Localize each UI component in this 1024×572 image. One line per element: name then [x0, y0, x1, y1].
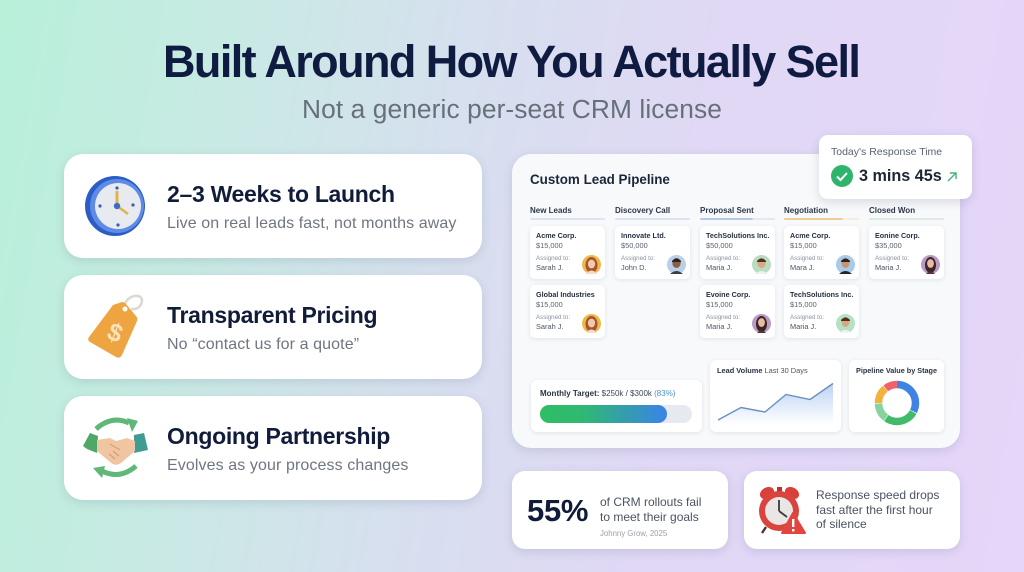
source: Johnny Grow, 2025 [600, 529, 667, 538]
statistic text [600, 495, 701, 524]
lead card: Innovate Ltd [615, 226, 690, 279]
description: Evolves as your process changes [167, 457, 408, 474]
lead card: TechSolutions Inc: TechSolutions Inc. [706, 231, 769, 240]
icon: price tag: $ [103, 317, 127, 349]
lead card: Acme Corp: Assigned to: [536, 255, 570, 262]
lead card: TechSolutions negotiation: Assigned to: [790, 314, 824, 321]
lead card: Eonine Corp [869, 226, 944, 279]
stat card: response speed [744, 471, 960, 549]
heading: 2–3 Weeks to Launch [167, 181, 395, 207]
panel: pipeline dashboard [512, 154, 960, 448]
callout text: of silence [816, 517, 867, 531]
statistic text: to meet their goals [600, 510, 699, 524]
progress bar [540, 405, 692, 423]
callout label: Today's Response Time [831, 146, 942, 158]
column: New Leads: New Leads [530, 206, 572, 215]
callout text: fast after the first hour [816, 502, 933, 516]
lead card: TechSolutions Inc: Assigned to: [706, 255, 740, 262]
lead card: TechSolutions negotiation [784, 285, 859, 338]
callout text: Response speed drops [816, 488, 939, 502]
lead card: Innovate Ltd: John D. [621, 263, 646, 272]
donut chart [874, 380, 920, 426]
icon: clock [85, 176, 145, 236]
dashboard heading: Custom Lead Pipeline [530, 172, 670, 187]
heading: Ongoing Partnership [167, 423, 390, 449]
heading: Transparent Pricing [167, 302, 377, 328]
lead card: TechSolutions Inc: $50,000 [706, 241, 733, 250]
icon: price tag [88, 294, 144, 358]
description: Live on real leads fast, not months away [167, 215, 456, 232]
lead card: TechSolutions negotiation: Maria J. [790, 322, 816, 331]
donut label: Pipeline Value by Stage [856, 366, 937, 375]
lead card: TechSolutions Inc [700, 226, 775, 279]
icon: handshake with arrows [83, 418, 148, 478]
lead card: Acme Corp: Acme Corp. [536, 231, 576, 240]
lead card: Innovate Ltd: Assigned to: [621, 255, 655, 262]
lead card: Global Industries: $15,000 [536, 300, 563, 309]
panel: pricing benefit [64, 275, 482, 379]
statistic: 55% [527, 493, 588, 528]
stat card: 55 percent [512, 471, 728, 549]
lead card: Acme Corp negotiation: Acme Corp. [790, 231, 830, 240]
lead card: Acme Corp: $15,000 [536, 241, 563, 250]
lead card: Global Industries [530, 285, 605, 338]
callout: response time [819, 135, 972, 199]
lead card: Evoine Corp: Assigned to: [706, 314, 740, 321]
lead card: Acme Corp [530, 226, 605, 279]
column: Discovery Call: Discovery Call [615, 206, 670, 215]
lead card: Eonine Corp: Maria J. [875, 263, 901, 272]
icon: trend arrow [948, 172, 957, 182]
lead card: Evoine Corp: Maria J. [706, 322, 732, 331]
lead card: Acme Corp negotiation: Mara J. [790, 263, 815, 272]
widget: monthly target [531, 380, 702, 432]
statistic text: of CRM rollouts fail [600, 495, 701, 509]
lead card: TechSolutions Inc: Maria J. [706, 263, 732, 272]
lead card: Evoine Corp: Evoine Corp. [706, 290, 750, 299]
lead card: TechSolutions negotiation: TechSolutions Inc. [790, 290, 853, 299]
column: Negotiation: Negotiation [784, 206, 828, 215]
lead card: Global Industries: Sarah J. [536, 322, 564, 331]
lead card: Evoine Corp [700, 285, 775, 338]
lead card: Evoine Corp: $15,000 [706, 300, 733, 309]
column: Proposal Sent: Proposal Sent [700, 206, 754, 215]
response value: 3 mins 45s [859, 167, 942, 185]
lead card: Acme Corp negotiation: Assigned to: [790, 255, 824, 262]
lead card: Global Industries: Global Industries [536, 290, 595, 299]
panel: partnership benefit [64, 396, 482, 500]
lead card: Innovate Ltd: Innovate Ltd. [621, 231, 666, 240]
target label: Monthly Target: $250k / $300k (83%) [540, 389, 675, 398]
widget: lead volume chart [710, 360, 841, 432]
callout text [816, 488, 939, 531]
lead card: Eonine Corp: Eonine Corp. [875, 231, 920, 240]
widget: pipeline value donut [849, 360, 944, 432]
lead card: Acme Corp negotiation [784, 226, 859, 279]
lead card: Acme Corp negotiation: $15,000 [790, 241, 817, 250]
column: Closed Won: Closed Won [869, 206, 915, 215]
lead card: Innovate Ltd: $50,000 [621, 241, 648, 250]
line chart [718, 382, 834, 421]
panel: launch benefit [64, 154, 482, 258]
chart label: Lead Volume Last 30 Days [717, 366, 808, 375]
icon: check badge [831, 165, 853, 187]
lead card: Eonine Corp: Assigned to: [875, 255, 909, 262]
subtitle: Not a generic per-seat CRM license [302, 94, 722, 124]
description: No “contact us for a quote” [167, 336, 359, 353]
icon: alarm clock warning [759, 486, 806, 534]
lead card: TechSolutions negotiation: $15,000 [790, 300, 817, 309]
lead card: Eonine Corp: $35,000 [875, 241, 902, 250]
lead card: Acme Corp: Sarah J. [536, 263, 564, 272]
title: Built Around How You Actually Sell [163, 36, 859, 87]
lead card: Global Industries: Assigned to: [536, 314, 570, 321]
